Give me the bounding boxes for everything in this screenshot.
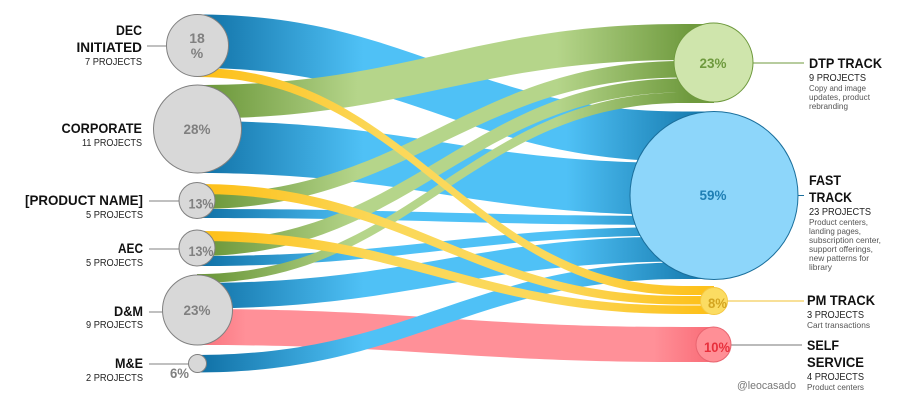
label: fast track: landing pages,	[809, 226, 861, 236]
flows: blue to fast track	[197, 14, 714, 372]
node: DTP track: 23%	[700, 55, 727, 71]
credit: @leocasado	[737, 380, 796, 392]
label: PM track	[807, 292, 875, 330]
label: D&M	[86, 303, 143, 331]
label: fast track: new patterns for	[809, 253, 869, 263]
label: product name: 5 PROJECTS	[86, 210, 143, 221]
node: product name: 13%	[188, 196, 214, 212]
label: self service: SERVICE	[807, 354, 864, 370]
node: PM track	[700, 288, 728, 314]
label: fast track: FAST	[809, 172, 841, 188]
node: D&M	[162, 275, 232, 345]
label: fast track: support offerings,	[809, 244, 873, 254]
label: M&E: 2 PROJECTS	[86, 373, 143, 384]
node: M&E	[170, 354, 206, 381]
label: DEC initiated: 7 PROJECTS	[85, 57, 142, 68]
label: PM track: Cart transactions	[807, 320, 870, 330]
label: fast track: library	[809, 262, 833, 272]
label: fast track: TRACK	[809, 189, 852, 205]
label: AEC: 5 PROJECTS	[86, 258, 143, 269]
label: PM track: PM TRACK	[807, 292, 875, 308]
label: DEC initiated	[76, 22, 142, 68]
label: DTP track: Copy and image	[809, 83, 866, 93]
label: DTP track: updates, product	[809, 92, 871, 102]
node: DEC initiated: 18	[189, 30, 205, 46]
label: product name: [PRODUCT NAME]	[25, 192, 143, 208]
label: corporate: CORPORATE	[62, 120, 142, 136]
node: fast track: 59%	[700, 187, 727, 203]
label: fast track	[809, 172, 881, 272]
connector lines	[147, 46, 804, 364]
label: D&M: 9 PROJECTS	[86, 320, 143, 331]
label: fast track: 23 PROJECTS	[809, 207, 871, 218]
label: self service: SELF	[807, 337, 839, 353]
node: DEC initiated: %	[191, 45, 204, 61]
label: self service: 4 PROJECTS	[807, 372, 864, 383]
label: DTP track: rebranding	[809, 101, 848, 111]
node: corporate	[154, 85, 242, 173]
node: AEC: 13%	[188, 243, 214, 259]
flows: yellow to PM track	[197, 68, 714, 314]
label: fast track: subscription center,	[809, 235, 881, 245]
label: product name	[25, 192, 143, 221]
node: DEC initiated	[166, 14, 228, 76]
node: product name	[179, 182, 215, 218]
node: PM track: 8%	[708, 295, 728, 311]
node: D&M: 23%	[184, 302, 211, 318]
label: self service: Product centers	[807, 382, 864, 392]
node: self service: 10%	[704, 339, 731, 355]
label: PM track: 3 PROJECTS	[807, 310, 864, 321]
label: M&E	[86, 355, 143, 384]
label: AEC	[86, 240, 143, 269]
label: DTP track	[809, 55, 882, 111]
node: M&E: 6%	[170, 365, 190, 381]
node: AEC	[179, 230, 215, 266]
node: self service	[696, 327, 731, 362]
label: M&E: M&E	[115, 355, 143, 371]
flows: pink to self service	[197, 309, 714, 362]
label: D&M: D&M	[114, 303, 143, 319]
flows: green to DTP track	[197, 24, 714, 283]
label: DEC initiated: INITIATED	[76, 39, 142, 55]
label: corporate	[62, 120, 142, 149]
label: DEC initiated: DEC	[116, 22, 142, 38]
label: self service	[807, 337, 864, 392]
label: AEC: AEC	[118, 240, 143, 256]
node: DTP track	[674, 23, 753, 102]
node: fast track	[630, 112, 798, 280]
label: corporate: 11 PROJECTS	[82, 138, 142, 149]
label: DTP track: 9 PROJECTS	[809, 73, 866, 84]
node: corporate: 28%	[184, 121, 211, 137]
label: fast track: Product centers,	[809, 217, 868, 227]
label: DTP track: DTP TRACK	[809, 55, 882, 71]
